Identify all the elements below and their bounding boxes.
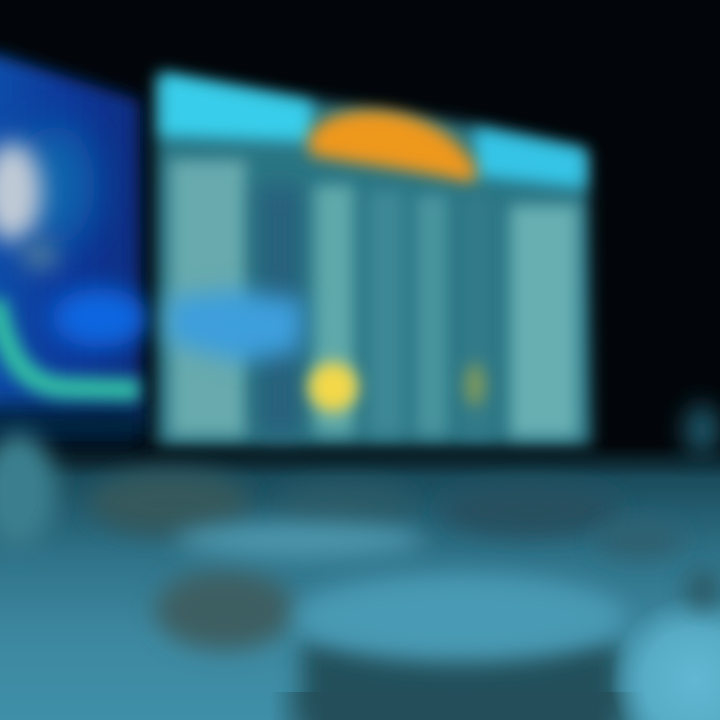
panel: left blue screen: [0, 50, 148, 445]
cylinder: mid left: [155, 570, 295, 650]
header: left cyan: [160, 72, 312, 142]
icon: yellow circle: [308, 362, 358, 412]
chart line: teal curve: [0, 300, 140, 390]
header: right cyan: [475, 128, 585, 188]
figure shadow: [22, 241, 58, 269]
highlight: mid band: [175, 522, 425, 558]
object: right edge dark: [686, 570, 720, 610]
column: middle a: [368, 190, 404, 435]
column: light narrow: [314, 185, 354, 435]
cylinder: front centre body: [302, 640, 618, 720]
panel: foreground table: [0, 404, 720, 720]
column: dark: [258, 185, 302, 435]
cylinder: front centre top: [295, 574, 625, 662]
column: middle b: [416, 195, 448, 435]
header: orange dome: [308, 110, 476, 184]
highlight: blue band: [168, 290, 305, 362]
highlight: bottom right: [600, 595, 720, 720]
icon: white figure: [0, 142, 42, 242]
column: right light: [510, 205, 578, 437]
column: middle c: [460, 195, 492, 435]
object: right edge upper: [684, 404, 720, 456]
dark lower band: [0, 405, 145, 445]
bright blue area: [52, 288, 148, 348]
panel: central table screen: [156, 72, 592, 446]
icon: small olive mark: [465, 363, 485, 407]
cylinder: far right: [595, 522, 685, 558]
cylinder: rear right: [440, 484, 620, 536]
cyan glow: [15, 125, 95, 245]
cylinder: rear left: [90, 471, 250, 535]
column: left light: [170, 160, 246, 436]
left object: [0, 432, 56, 548]
cylinder: rear centre: [275, 483, 415, 527]
cylinder: front centre bottom strip: [270, 692, 650, 720]
